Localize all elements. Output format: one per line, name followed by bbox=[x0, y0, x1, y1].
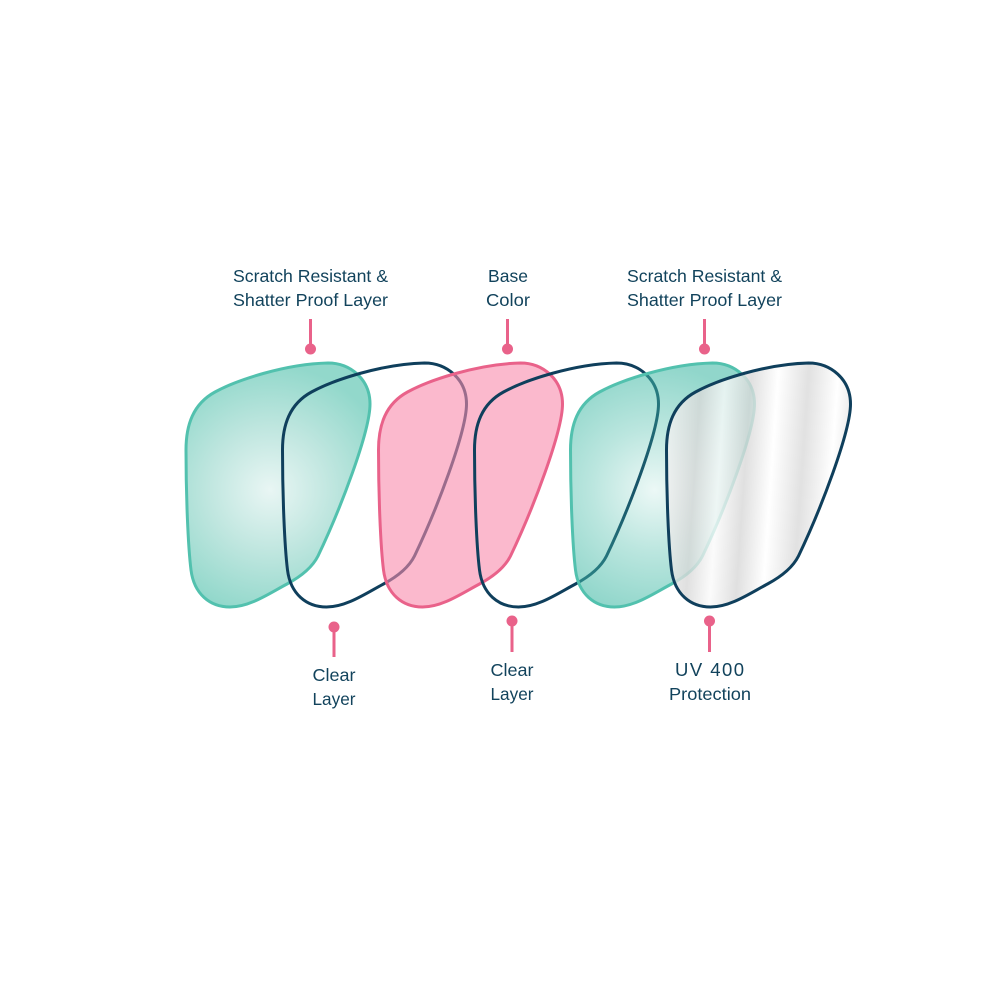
callout: scratch resistant layer left: Scratch Resistant & bbox=[233, 266, 388, 286]
callout: base color: Color bbox=[486, 290, 530, 310]
callout: UV 400 protection bbox=[669, 616, 751, 704]
callout: scratch resistant layer right: Scratch Resistant & bbox=[627, 266, 782, 286]
lens: teal scratch resistant layer 1 bbox=[186, 363, 370, 607]
callout: scratch resistant layer left: Shatter Proof Layer bbox=[233, 290, 388, 310]
callout: clear layer left: Clear bbox=[312, 665, 356, 685]
callout: base color bbox=[486, 266, 530, 354]
callout: UV 400 protection: Protection bbox=[669, 684, 751, 704]
callout: scratch resistant layer right bbox=[627, 266, 782, 354]
callout: clear layer middle: Clear bbox=[490, 660, 534, 680]
callout: scratch resistant layer left bbox=[233, 266, 388, 354]
lens: clear layer 1 bbox=[282, 363, 466, 607]
callout: clear layer middle bbox=[490, 616, 534, 704]
lens: pink base color bbox=[378, 363, 562, 607]
callout: UV 400 protection: UV 400 bbox=[675, 659, 744, 680]
callout: base color: Base bbox=[488, 266, 528, 286]
callout: scratch resistant layer right: Shatter Proof Layer bbox=[627, 290, 782, 310]
lens: teal scratch resistant layer 2 bbox=[570, 363, 754, 607]
callout: clear layer left bbox=[312, 622, 356, 709]
lens: UV 400 protection layer bbox=[666, 363, 850, 607]
lens: clear layer 2 bbox=[474, 363, 658, 607]
callout: clear layer middle: Layer bbox=[490, 684, 534, 704]
callout: clear layer left: Layer bbox=[312, 689, 356, 709]
